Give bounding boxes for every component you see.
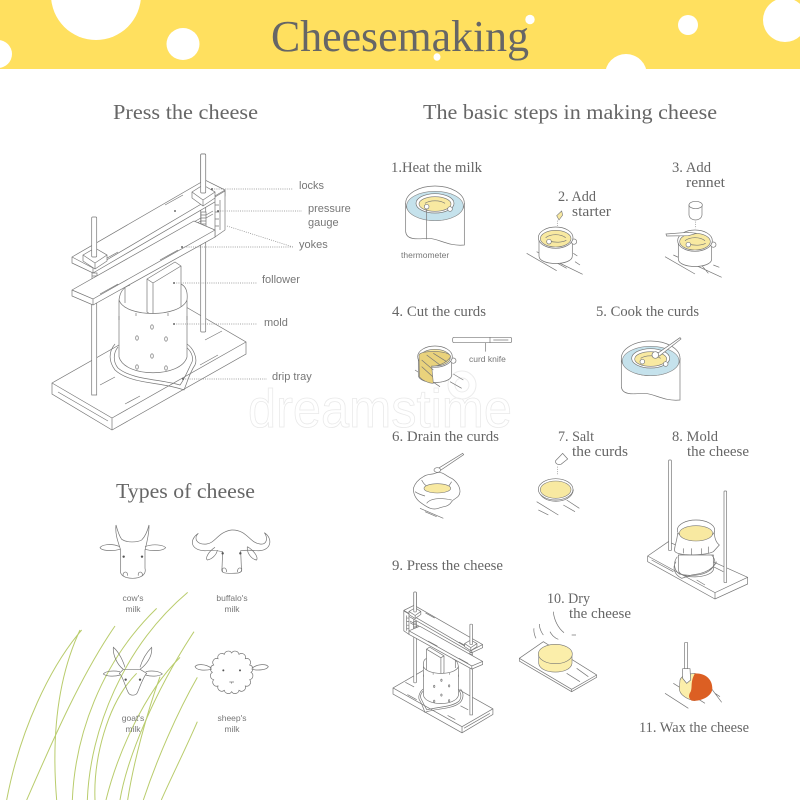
watermark: dreamstime [248, 379, 512, 439]
step 4 illustration: cut the curds [415, 337, 512, 388]
label: pressure gauge: gauge [308, 217, 339, 229]
label: sheep's milk: sheep's [217, 713, 247, 723]
step 6 illustration: drain the curds [413, 453, 464, 518]
label: cow's milk: cow's [122, 593, 144, 603]
step 10 illustration: dry the cheese [519, 612, 597, 692]
icon: buffalo [192, 530, 270, 573]
label: goat's milk: goat's [122, 713, 144, 723]
step 3 illustration: add rennet [665, 201, 722, 277]
label: cow's milk [122, 593, 144, 614]
label: follower: follower [262, 274, 300, 286]
label: mold: mold [264, 317, 288, 329]
title: Cheesemaking [271, 12, 529, 61]
label: cow's milk: milk [125, 604, 141, 614]
label: buffalo's milk [216, 593, 248, 614]
step 5 illustration: cook the curds [621, 338, 681, 400]
step 9 illustration: press the cheese [393, 592, 493, 733]
step 3 label: 3. Add [672, 160, 712, 176]
step 2 label: starter [572, 204, 611, 220]
label: pressure gauge [308, 203, 351, 229]
step 11 label: 11. Wax the cheese [639, 720, 749, 736]
label: sheep's milk: milk [224, 724, 240, 734]
grass [7, 592, 197, 800]
step 4 label: 4. Cut the curds [392, 304, 486, 320]
press label lines [173, 188, 302, 380]
step 8 illustration: mold the cheese [648, 460, 748, 599]
step 2 illustration: add starter [527, 211, 583, 274]
diagram: cheese press [52, 154, 246, 430]
label: thermometer: thermometer [401, 250, 449, 260]
step 7 label: 7. Salt [558, 429, 594, 445]
step 2 label [558, 189, 611, 220]
step 2 label: 2. Add [558, 189, 597, 205]
step 10 label: 10. Dry [547, 591, 591, 607]
label: sheep's milk [217, 713, 247, 734]
step 7 label: the curds [572, 444, 628, 460]
label: pressure gauge: pressure [308, 203, 351, 215]
label: buffalo's milk: buffalo's [216, 593, 248, 603]
step 10 label [547, 591, 631, 622]
label: locks: locks [299, 180, 325, 192]
step 1 label: 1.Heat the milk [391, 160, 483, 176]
label: goat's milk [122, 713, 144, 734]
step 7 illustration: salt the curds [537, 453, 579, 515]
step 1 illustration: heat the milk [406, 186, 464, 245]
label: drip tray: drip tray [272, 371, 312, 383]
heading: basic steps: The basic steps in making cheese [423, 100, 717, 124]
step 7 label [558, 429, 628, 460]
icon: sheep [195, 651, 268, 694]
icon: goat [103, 647, 162, 695]
step 8 label: the cheese [687, 444, 749, 460]
step 10 label: the cheese [569, 606, 631, 622]
label: buffalo's milk: milk [224, 604, 240, 614]
step 3 label: rennet [686, 175, 725, 191]
step 5 label: 5. Cook the curds [596, 304, 699, 320]
step 3 label [672, 160, 725, 191]
heading: press the cheese: Press the cheese [113, 100, 258, 124]
label: goat's milk: milk [125, 724, 141, 734]
label: curd knife: curd knife [469, 354, 506, 364]
header banner [0, 0, 800, 96]
heading: types of cheese: Types of cheese [116, 479, 255, 503]
icon: cow [100, 525, 166, 578]
step 9 label: 9. Press the cheese [392, 558, 503, 574]
label: yokes: yokes [299, 239, 328, 251]
step 11 illustration: wax the cheese [665, 643, 722, 708]
step 6 label: 6. Drain the curds [392, 429, 499, 445]
step 8 label: 8. Mold [672, 429, 719, 445]
step 8 label [672, 429, 749, 460]
